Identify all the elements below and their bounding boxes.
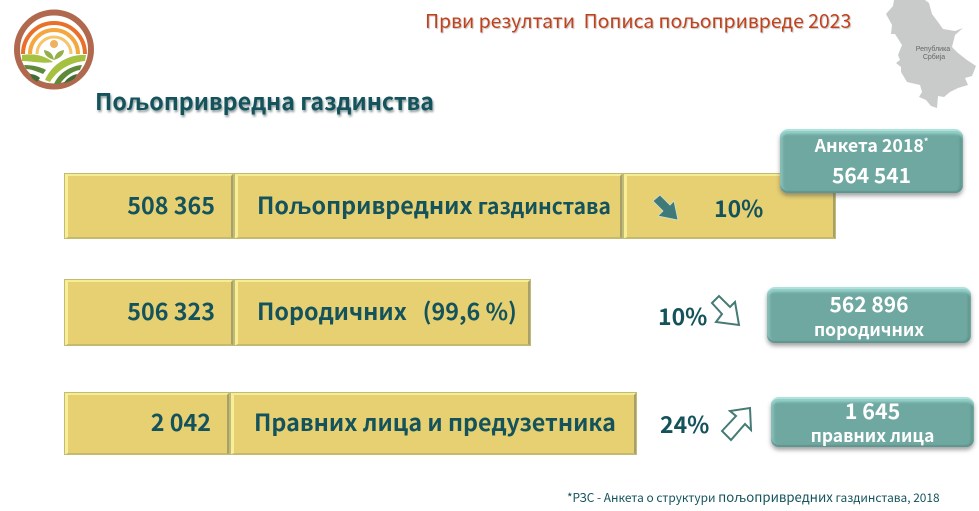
row 3 label — [230, 392, 637, 455]
row 1 change — [623, 173, 836, 239]
map of Serbia: Србија — [923, 53, 945, 61]
row 3 change: 24% — [660, 406, 709, 440]
row 1 label: Пољопривредних газдинстава — [257, 186, 611, 220]
row 2 bar — [64, 279, 531, 346]
row 2 label: Породичних (99,6 %) — [257, 293, 517, 327]
row 3 label: Правних лица и предузетника — [254, 404, 616, 438]
row 2 value — [64, 279, 234, 346]
heading: Пољопривредна газдинства — [95, 83, 434, 117]
row 2 label — [234, 279, 531, 346]
row 1 bar — [64, 173, 836, 239]
callout: legal entities 2018 — [771, 397, 974, 447]
row 3 bar — [64, 392, 637, 455]
footnote: *РЗС - Анкета о структури пољопривредних газдинстава, 2018 — [567, 487, 940, 506]
icon: outline up arrow — [720, 406, 752, 442]
row 1 change: 10% — [714, 190, 763, 224]
callout: survey 2018 — [780, 129, 963, 193]
callout value: 564 541 — [832, 160, 911, 190]
callout label: породичних — [814, 317, 924, 342]
callout title: Анкета 2018* — [815, 132, 928, 158]
callout value: 562 896 — [829, 289, 909, 319]
map label: Република — [916, 45, 950, 53]
logo — [14, 10, 94, 90]
row 1 value: 508 365 — [127, 186, 215, 220]
row 3 value — [64, 392, 230, 455]
row 3 value: 2 042 — [151, 404, 211, 438]
callout label: правних лица — [811, 423, 934, 448]
row 2 value: 506 323 — [127, 293, 215, 327]
callout value: 1 645 — [845, 395, 900, 426]
map of Serbia — [886, 0, 976, 108]
icon: filled down arrow — [652, 194, 678, 220]
row 2 change: 10% — [658, 298, 707, 332]
icon: outline down arrow — [710, 294, 740, 326]
row 1 label — [234, 173, 623, 239]
callout: family 2018 — [767, 287, 971, 343]
row 1 value — [64, 173, 234, 239]
top title: Први резултати Пописа пољопривреде 2023 — [425, 5, 851, 34]
